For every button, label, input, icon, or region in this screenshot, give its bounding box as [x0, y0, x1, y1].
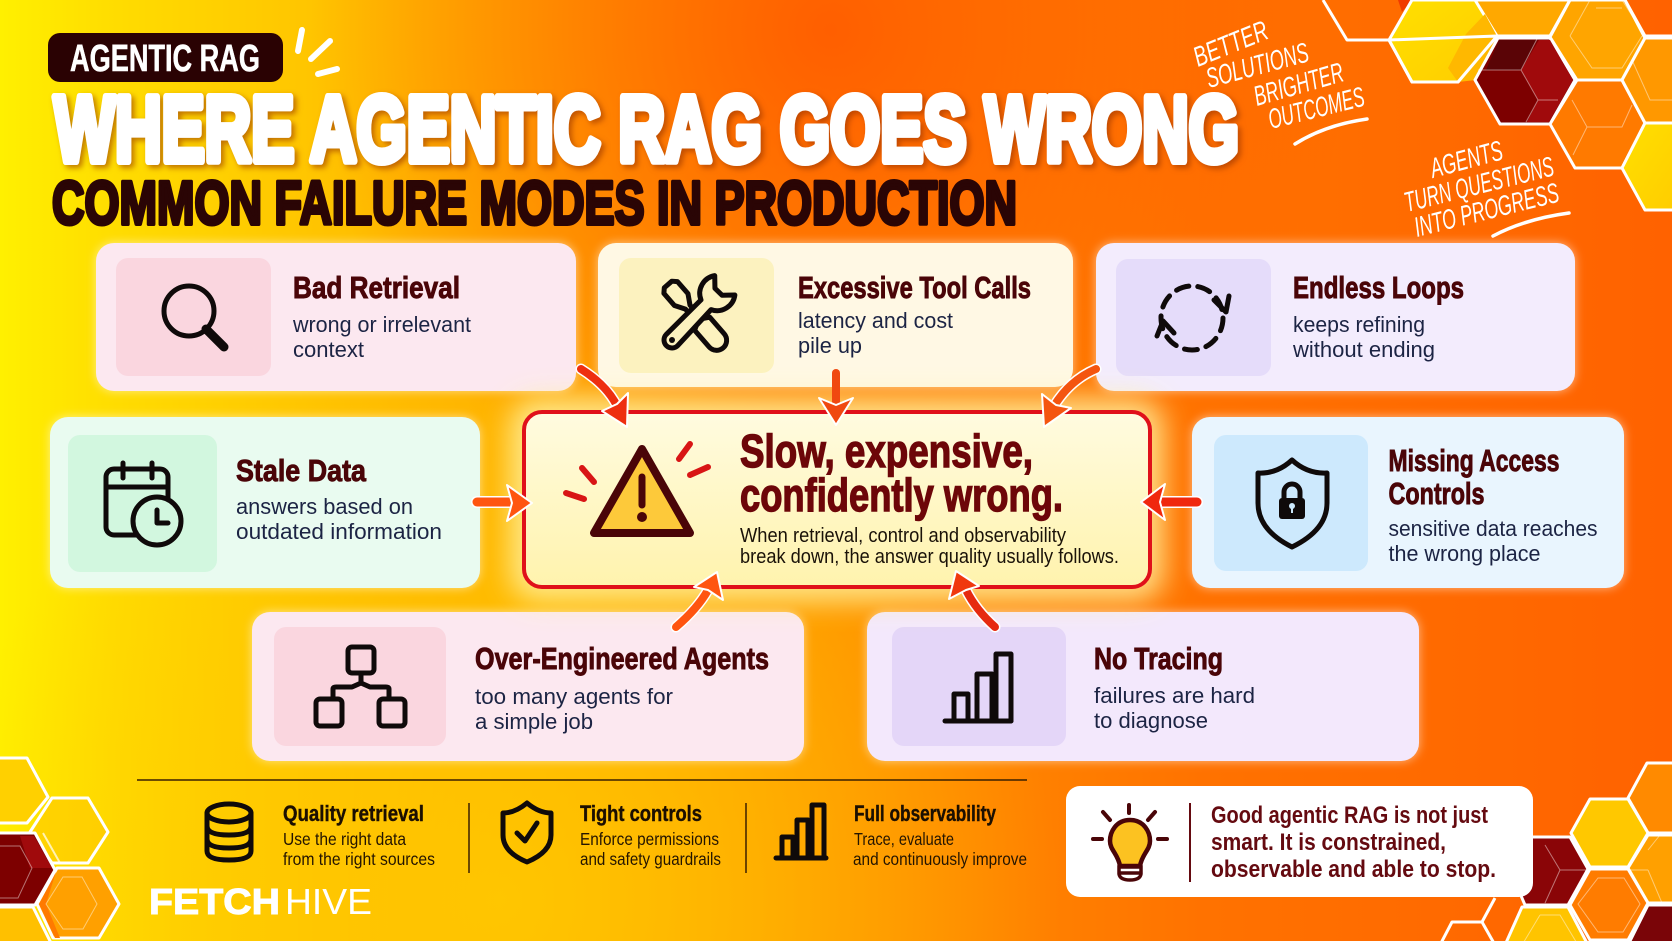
panel: Over-Engineered Agents: [252, 612, 804, 761]
panel: Bad Retrieval: Bad Retrieval: [293, 270, 460, 305]
icon: warning triangle: [566, 444, 708, 533]
honeycomb: top right: [1323, 0, 1672, 210]
icon: sparkle strokes: [298, 30, 337, 74]
handwritten note: better solutions: [1189, 15, 1368, 144]
honeycomb: bottom right: [1440, 763, 1672, 941]
pillar: tight controls: and safety guardrails: [580, 849, 721, 869]
handwritten note: agents turn questions: [1401, 135, 1569, 243]
handwritten note: better solutions: BETTER: [1189, 15, 1273, 73]
pillar: quality retrieval: from the right sources: [283, 849, 435, 869]
callout: good agentic RAG: [1066, 786, 1533, 897]
panel: Over-Engineered Agents: too many agents for: [475, 684, 673, 709]
panel: Missing Access Controls: sensitive data reaches: [1388, 516, 1598, 541]
panel: Excessive Tool Calls: latency and cost: [798, 308, 953, 333]
arrow: over-engineered agents to centre: [676, 572, 723, 627]
panel: Missing Access Controls: Missing Access: [1388, 443, 1560, 478]
pillar: full observability: and continuously improve: [853, 849, 1027, 869]
panel: Endless Loops: without ending: [1292, 337, 1435, 362]
arrow: missing access controls to centre: [1141, 484, 1197, 520]
honeycomb: bottom left: [0, 758, 119, 941]
pillar: full observability: Full observability: [854, 801, 997, 826]
pillar: tight controls: [503, 801, 721, 869]
logo: Fetch Hive: [149, 881, 372, 922]
handwritten note: better solutions: OUTCOMES: [1265, 81, 1368, 135]
panel: Bad Retrieval: wrong or irrelevant: [292, 312, 471, 337]
callout: good agentic RAG: smart. It is constrained,: [1211, 829, 1446, 856]
panel: central outcome: break down, the answer quality usually follows.: [740, 546, 1119, 568]
pillar: tight controls: Enforce permissions: [580, 829, 719, 849]
panel: Excessive Tool Calls: [598, 243, 1073, 387]
panel: No Tracing: failures are hard: [1094, 683, 1255, 708]
panel: No Tracing: No Tracing: [1094, 641, 1223, 676]
panel: Stale Data: [50, 417, 480, 588]
pillar: full observability: Trace, evaluate: [854, 829, 954, 849]
pillar: quality retrieval: [207, 801, 435, 869]
panel: Endless Loops: [1096, 243, 1575, 391]
icon: shield check: [503, 803, 551, 862]
icon: light bulb: [1093, 805, 1167, 880]
panel: Bad Retrieval: context: [293, 337, 364, 362]
panel: Excessive Tool Calls: pile up: [798, 333, 862, 358]
callout: good agentic RAG: observable and able to stop.: [1211, 856, 1496, 883]
arrow: endless loops to centre: [1042, 369, 1096, 427]
panel: central outcome: Slow, expensive,: [740, 425, 1033, 477]
handwritten note: better solutions: SOLUTIONS: [1203, 37, 1312, 94]
panel: Missing Access Controls: Controls: [1388, 476, 1484, 511]
panel: Stale Data: outdated information: [236, 519, 442, 544]
panel: Bad Retrieval: [96, 243, 576, 391]
arrow: stale data to centre: [477, 485, 532, 521]
arrow: no tracing to centre: [949, 571, 995, 627]
handwritten note: agents turn questions: TURN QUESTIONS: [1401, 151, 1557, 218]
pillar: full observability: [776, 801, 1027, 869]
panel: Missing Access Controls: [1192, 417, 1624, 588]
panel: Excessive Tool Calls: Excessive Tool Calls: [798, 270, 1031, 305]
arrow: bad retrieval to centre: [581, 369, 628, 427]
handwritten note: agents turn questions: AGENTS: [1425, 135, 1506, 184]
panel: Stale Data: Stale Data: [236, 453, 367, 488]
panel: central outcome: When retrieval, control and observability: [740, 525, 1066, 547]
pillar: tight controls: Tight controls: [580, 801, 702, 826]
handwritten note: agents turn questions: INTO PROGRESS: [1411, 177, 1562, 243]
panel: Missing Access Controls: the wrong place: [1388, 541, 1540, 566]
badge: AGENTIC RAG: AGENTIC RAG: [70, 38, 260, 80]
pillar: quality retrieval: Use the right data: [283, 829, 406, 849]
panel: No Tracing: [867, 612, 1419, 761]
panel: Endless Loops: Endless Loops: [1293, 270, 1464, 305]
pillar: quality retrieval: Quality retrieval: [283, 801, 424, 826]
callout: good agentic RAG: Good agentic RAG is not just: [1211, 802, 1488, 829]
subtitle: COMMON FAILURE MODES IN PRODUCTION: [52, 169, 1017, 237]
panel: Over-Engineered Agents: Over-Engineered Agents: [475, 641, 769, 676]
handwritten note: better solutions: BRIGHTER: [1250, 57, 1347, 112]
icon: bar chart: [776, 805, 826, 858]
logo: Fetch Hive: HIVE: [285, 881, 372, 922]
panel: Endless Loops: keeps refining: [1293, 312, 1425, 337]
badge: AGENTIC RAG: [48, 33, 283, 82]
icon: database: [207, 804, 251, 860]
arrow: excessive tool calls to centre: [819, 373, 853, 425]
panel: central outcome: confidently wrong.: [740, 469, 1063, 521]
panel: No Tracing: to diagnose: [1094, 708, 1208, 733]
panel: central outcome: [510, 398, 1164, 601]
panel: Over-Engineered Agents: a simple job: [475, 709, 593, 734]
panel: Stale Data: answers based on: [236, 494, 413, 519]
logo: Fetch Hive: FETCH: [149, 881, 280, 922]
